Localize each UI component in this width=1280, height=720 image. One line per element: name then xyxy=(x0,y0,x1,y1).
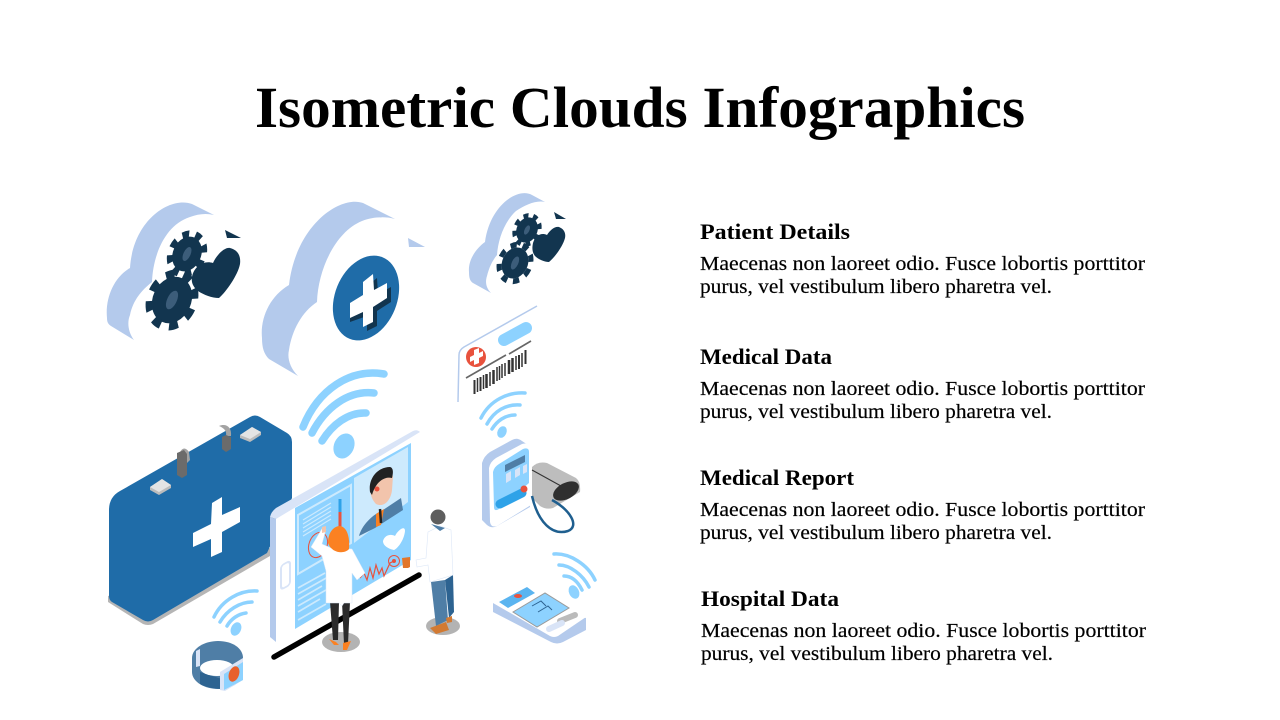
record panel xyxy=(298,485,351,620)
wifi: above tablet xyxy=(303,373,384,462)
cloud: left with gears and heart xyxy=(107,202,241,340)
woman doctor xyxy=(311,526,365,652)
ECG line xyxy=(360,556,400,580)
card: patient barcode xyxy=(458,306,537,402)
wifi: above monitor device xyxy=(554,554,595,600)
text block: medical report: Medical Report xyxy=(700,465,855,490)
wifi: above wristband xyxy=(214,591,257,637)
text block: hospital data: purus, vel vestibulum libero pharetra vel. xyxy=(701,643,1053,665)
doctor portrait panel xyxy=(354,447,408,543)
text block: medical report xyxy=(700,465,1145,544)
text block: medical report: purus, vel vestibulum libero pharetra vel. xyxy=(700,522,1052,544)
title: Isometric Clouds Infographics xyxy=(255,75,1025,140)
text block: patient details: Patient Details xyxy=(700,219,850,244)
digital health monitor xyxy=(493,586,586,644)
text block: patient details xyxy=(700,219,1145,298)
wristband xyxy=(192,641,243,691)
wifi: under card xyxy=(481,393,525,439)
tablet xyxy=(270,430,420,662)
illustration: isometric medical scene xyxy=(107,193,595,691)
barcode xyxy=(474,350,526,394)
tablet home button xyxy=(281,561,290,590)
text block: medical report: Maecenas non laoreet odio. Fusce lobortis porttitor xyxy=(700,499,1145,521)
text block: hospital data: Hospital Data xyxy=(701,586,839,611)
tablet screen xyxy=(295,443,411,629)
text block: medical data: purus, vel vestibulum libero pharetra vel. xyxy=(700,401,1052,423)
cloud: right with gears and heart xyxy=(469,193,566,293)
medical case xyxy=(108,416,292,625)
cloud: centre with medical cross xyxy=(262,202,425,376)
blood pressure monitor xyxy=(482,439,582,532)
text block: patient details: Maecenas non laoreet odio. Fusce lobortis porttitor xyxy=(700,253,1145,275)
text block: patient details: purus, vel vestibulum libero pharetra vel. xyxy=(700,276,1052,298)
text block: medical data: Medical Data xyxy=(700,344,832,369)
text block: hospital data: Maecenas non laoreet odio. Fusce lobortis porttitor xyxy=(701,620,1146,642)
blood pressure cuff xyxy=(532,462,582,532)
screen heart xyxy=(383,528,405,550)
man doctor xyxy=(402,510,460,635)
text block: medical data xyxy=(700,344,1145,423)
case cross xyxy=(193,497,240,557)
tablet stand line xyxy=(274,575,419,657)
coffee cup xyxy=(402,557,410,568)
text block: hospital data xyxy=(701,586,1146,665)
text block: medical data: Maecenas non laoreet odio. Fusce lobortis porttitor xyxy=(700,378,1145,400)
case handles and latches xyxy=(150,425,261,495)
